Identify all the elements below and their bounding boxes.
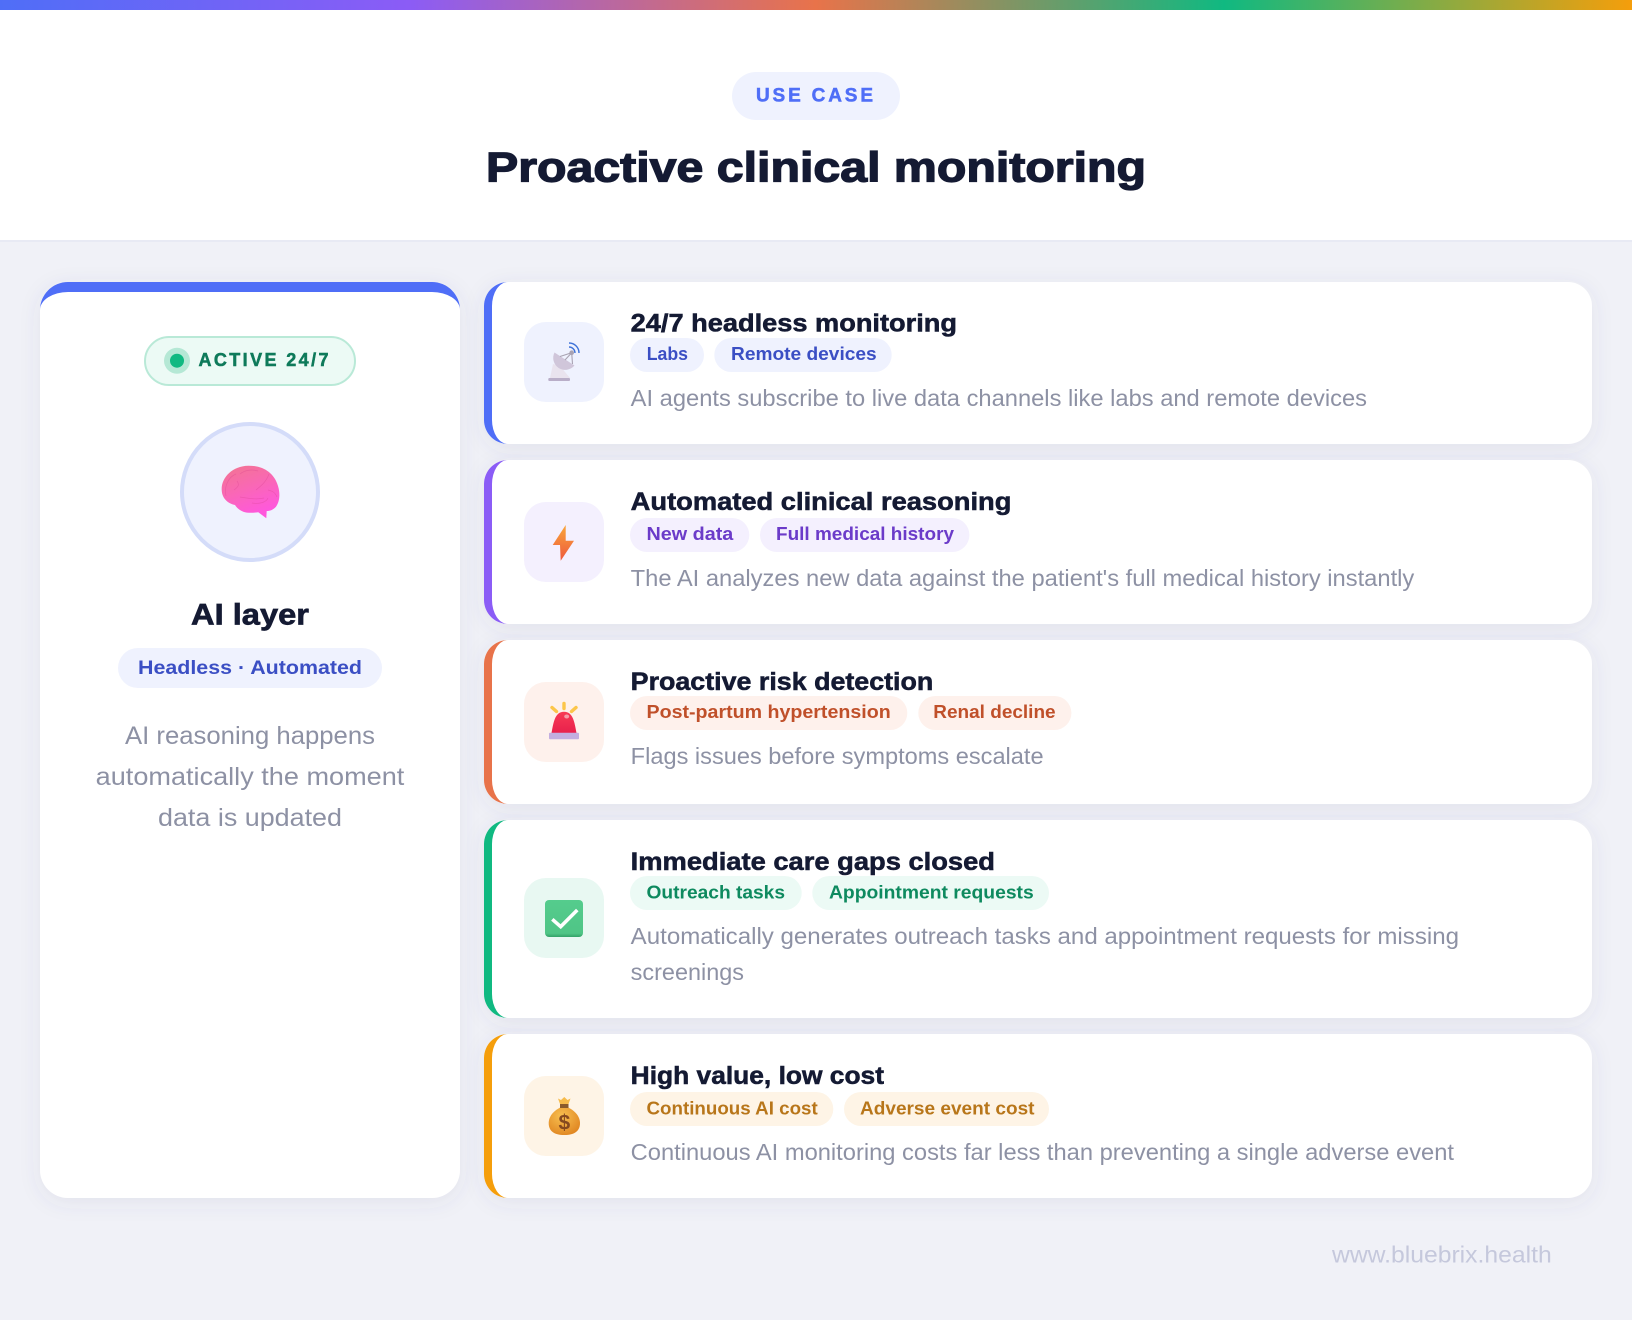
tag: labs [630, 338, 704, 372]
footer url: www.bluebrix.health [1331, 1242, 1552, 1268]
tag: full medical history [760, 518, 969, 552]
description [96, 722, 404, 832]
tag: appointment requests: Appointment requests [829, 882, 1034, 902]
tag: remote devices: Remote devices [731, 344, 877, 364]
icon: satellite dish [524, 322, 604, 402]
description: Flags issues before symptoms escalate [631, 743, 1044, 769]
tag: outreach tasks: Outreach tasks [646, 882, 785, 902]
description: The AI analyzes new data against the patient's full medical history instantly [631, 565, 1415, 591]
card: high value, low cost [484, 1034, 1592, 1198]
description: AI reasoning happens [125, 722, 375, 750]
tag: remote devices [714, 338, 892, 372]
badge: active 24/7 [145, 337, 355, 385]
description: AI agents subscribe to live data channels like labs and remote devices [631, 385, 1367, 411]
heading: Automated clinical reasoning [631, 488, 1011, 516]
description: data is updated [158, 804, 342, 832]
heading: 24/7 headless monitoring [631, 310, 957, 338]
tag: adverse event cost: Adverse event cost [860, 1099, 1035, 1119]
panel: AI layer [40, 282, 460, 1198]
card: immediate care gaps closed [484, 820, 1592, 1018]
tag: labs: Labs [647, 344, 688, 364]
badge: use case [732, 72, 900, 120]
heading: High value, low cost [631, 1062, 885, 1090]
badge: use case: USE CASE [756, 86, 873, 106]
description: screenings [631, 959, 744, 985]
tag: headless automated [118, 648, 382, 688]
tag: post-partum hypertension [630, 696, 907, 730]
tag: outreach tasks [630, 876, 802, 910]
heading: Immediate care gaps closed [631, 848, 995, 876]
tag: renal decline [918, 696, 1071, 730]
heading: AI layer: AI layer [191, 598, 309, 631]
badge: active 24/7: ACTIVE 24/7 [198, 350, 328, 370]
tag: appointment requests [812, 876, 1049, 910]
icon: money bag [524, 1076, 604, 1156]
tag: continuous AI cost: Continuous AI cost [646, 1099, 818, 1119]
card: 24/7 headless monitoring [484, 282, 1592, 444]
card: proactive risk detection [484, 640, 1592, 804]
card: automated clinical reasoning [484, 460, 1592, 624]
icon: money bag: $ [558, 1112, 570, 1134]
tag: continuous AI cost [630, 1092, 833, 1126]
icon: siren [524, 682, 604, 762]
icon: check box [524, 878, 604, 958]
description: automatically the moment [96, 763, 404, 791]
tag: post-partum hypertension: Post-partum hypertension [646, 702, 891, 722]
description: Continuous AI monitoring costs far less than preventing a single adverse event [631, 1139, 1455, 1165]
tag: full medical history: Full medical history [776, 524, 954, 544]
avatar circle with brain icon [182, 424, 318, 560]
icon: lightning bolt [524, 502, 604, 582]
heading: Proactive risk detection [631, 668, 933, 696]
tag: headless automated: Headless · Automated [138, 657, 362, 679]
rainbow top bar [0, 0, 1632, 10]
header [0, 0, 1632, 242]
description: Automatically generates outreach tasks and appointment requests for missing [631, 923, 1459, 949]
tag: new data: New data [646, 524, 734, 544]
description [631, 923, 1459, 985]
title: Proactive clinical monitoring [486, 144, 1146, 190]
tag: new data [630, 518, 749, 552]
tag: adverse event cost [844, 1092, 1049, 1126]
tag: renal decline: Renal decline [933, 702, 1056, 722]
